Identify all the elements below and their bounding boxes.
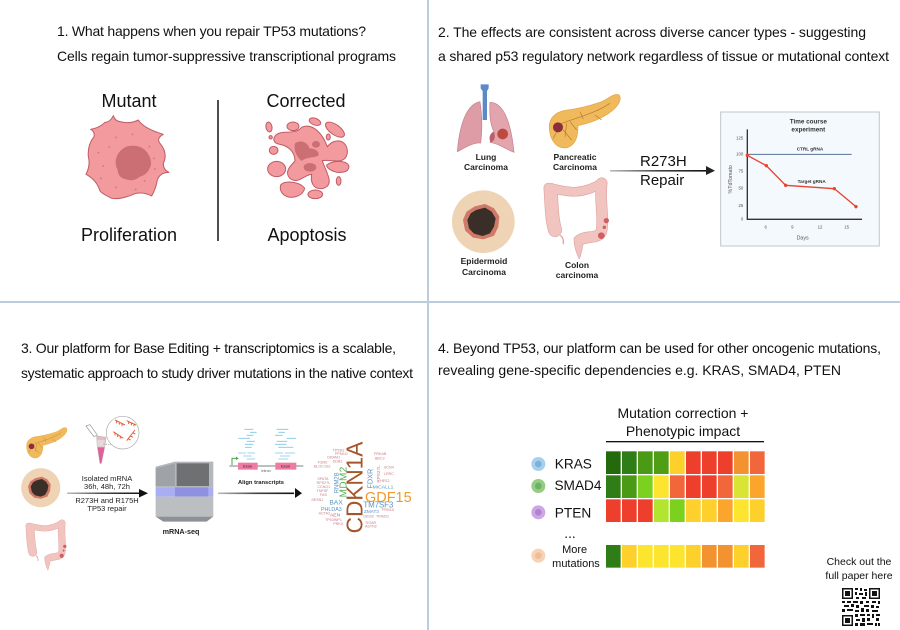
word cloud: genes: PRKX <box>333 522 344 526</box>
label: Apoptosis: Apoptosis <box>267 225 347 245</box>
label: lung carcinoma <box>464 152 508 172</box>
icon: align transcripts: Exon <box>243 464 252 469</box>
label: Corrected: Corrected <box>266 91 346 111</box>
word cloud: genes: SESN1 <box>311 498 323 502</box>
word cloud: genes: CCNG1 <box>317 485 330 489</box>
heatmap: mutation impact <box>531 405 765 570</box>
icon: mutant cell <box>86 116 169 199</box>
label: isolated mRNA: Isolated mRNA <box>82 474 132 483</box>
label: isolated mRNA: 36h, 48h, 72h <box>84 482 130 491</box>
row: KRAS cells <box>606 451 765 474</box>
word cloud: genes: PHLDA3 <box>321 507 342 513</box>
word cloud: genes <box>311 441 412 533</box>
chart: time course: 15 <box>844 224 850 229</box>
chart: time course: %TdTomato <box>728 165 734 194</box>
chart: time course: 125 <box>736 136 744 141</box>
word cloud: genes: AEN <box>330 512 341 518</box>
word cloud: genes: TP53INP1 <box>325 518 342 522</box>
icon: mRNA sequencer <box>156 462 213 522</box>
icon: QR code <box>842 588 880 626</box>
legend: gene labels: More <box>562 544 587 556</box>
callout: full paper: full paper here <box>825 570 893 582</box>
divider: mutant vs corrected <box>217 100 219 241</box>
word cloud: genes: GDF15 <box>365 490 412 506</box>
word cloud: genes: LRRC <box>384 472 394 476</box>
word cloud: genes: TNFSF <box>317 489 329 493</box>
word cloud: genes: TIGAR <box>365 521 377 525</box>
heading: panel 2 <box>438 24 889 64</box>
word cloud: genes: ASTN2 <box>365 525 377 529</box>
callout: full paper: Check out the <box>827 556 892 568</box>
heatmap title <box>617 405 748 439</box>
word cloud: genes: PRKAB <box>374 452 387 456</box>
chart: time course: 6 <box>764 224 767 229</box>
word cloud: genes: MDM2 <box>339 466 350 497</box>
word cloud: genes: HES2 <box>380 479 390 483</box>
heatmap title: Mutation correction + <box>617 405 748 421</box>
chart: time course: 0 <box>741 217 744 222</box>
word cloud: genes: SPATA <box>317 477 329 481</box>
word cloud: genes: TGM2 <box>317 460 327 464</box>
word cloud: genes: PPM1D <box>382 508 395 512</box>
word cloud: genes: CDKN1A <box>342 441 368 533</box>
callout: full paper <box>825 556 893 582</box>
label: epidermoid carcinoma: Epidermoid <box>461 256 507 266</box>
chart: time course <box>721 112 879 246</box>
label: isolated mRNA: TP53 repair <box>87 504 127 513</box>
label: align transcripts: Align transcripts <box>238 480 284 486</box>
legend: gene labels: ... <box>564 526 576 541</box>
word cloud: genes: DESI2 <box>363 514 374 518</box>
icon: epidermoid skin lesion <box>452 190 515 253</box>
heading: panel 1: 1. What happens when you repair TP53 mutations? <box>57 23 366 39</box>
word cloud: genes: RPS27L <box>376 465 381 483</box>
label: pancreatic carcinoma <box>553 152 597 172</box>
label: colon carcinoma <box>556 260 599 280</box>
icon: align transcripts: Intron <box>261 469 271 473</box>
label: Proliferation: Proliferation <box>81 225 177 245</box>
icon: small skin lesion <box>21 468 60 507</box>
icon: pancreas <box>549 94 620 148</box>
icon: tube with mRNA <box>86 416 139 463</box>
label: isolated mRNA: R273H and R175H <box>75 496 139 505</box>
heading: panel 1: Cells regain tumor-suppressive transcriptional programs <box>57 48 396 64</box>
word cloud: genes: TRIM22 <box>376 514 389 518</box>
chart: time course: 100 <box>736 151 744 156</box>
word cloud: genes: FDXR <box>365 469 374 489</box>
chart: time course: 25 <box>738 203 744 208</box>
heading: panel 3: 3. Our platform for Base Editing + transcriptomics is a scalable, <box>21 340 396 356</box>
label: lung carcinoma: Lung <box>476 152 496 162</box>
heading: panel 2: 2. The effects are consistent across diverse cancer types - suggesting <box>438 24 866 40</box>
icon: small pancreas <box>27 428 67 458</box>
chart: time course: Time course <box>790 119 827 126</box>
legend: gene labels <box>531 457 602 570</box>
row: PTEN cells <box>606 499 765 522</box>
word cloud: genes: RNM2B <box>335 472 341 493</box>
icon: colon <box>548 183 609 259</box>
word cloud: genes: ACTA2 <box>319 512 330 516</box>
label: Mutant: Mutant <box>101 91 157 111</box>
word cloud: genes: FAS <box>320 493 327 497</box>
heading: panel 3 <box>21 340 413 381</box>
label: isolated mRNA <box>75 474 139 513</box>
icon: apoptotic cell <box>265 116 349 199</box>
arrow: to sequencer <box>67 489 148 498</box>
heading: panel 4: revealing gene-specific dependencies e.g. KRAS, SMAD4, PTEN <box>438 362 841 378</box>
heading: panel 4 <box>438 340 881 378</box>
word cloud: genes: TP53I3 <box>333 449 344 453</box>
label: lung carcinoma: Carcinoma <box>464 162 508 172</box>
icon: align transcripts <box>229 429 303 473</box>
label: R273H repair: Repair <box>640 172 684 189</box>
label: colon carcinoma: Colon <box>565 260 589 270</box>
row: more mutations cells <box>606 545 765 568</box>
word cloud: genes: BLOC1S2 <box>314 464 330 468</box>
label: R273H repair <box>640 153 687 189</box>
chart: time course: Days <box>797 235 809 241</box>
chart: time course: 9 <box>791 224 794 229</box>
chart: time course: CTRL gRNA <box>797 147 824 152</box>
label: epidermoid carcinoma <box>461 256 507 277</box>
word cloud: genes: BBC3 <box>375 456 385 460</box>
heading: panel 1 <box>57 23 396 64</box>
word cloud: genes: PPM1D <box>335 452 348 456</box>
legend: gene labels: SMAD4 <box>554 478 602 493</box>
icon: lung <box>457 84 514 152</box>
icon: small colon <box>29 523 66 570</box>
arrow: repair <box>610 166 715 175</box>
heading: panel 4: 4. Beyond TP53, our platform can be used for other oncogenic mutations, <box>438 340 881 356</box>
label: colon carcinoma: carcinoma <box>556 270 599 280</box>
chart: time course: Target gRNA <box>798 179 826 184</box>
icon: align transcripts: Exon <box>281 464 290 469</box>
legend: gene labels: KRAS <box>555 457 592 472</box>
chart: time course: experiment <box>791 127 826 134</box>
label: pancreatic carcinoma: Pancreatic <box>554 152 597 162</box>
arrow: to word cloud <box>218 488 302 498</box>
word cloud: genes: MICALL1 <box>373 485 394 491</box>
word cloud: genes: TM7SF3 <box>363 501 394 510</box>
label: pancreatic carcinoma: Carcinoma <box>553 162 597 172</box>
chart: time course: 75 <box>738 169 744 174</box>
panel: other mutations <box>438 340 893 626</box>
panel: cancer types <box>438 24 889 280</box>
label: R273H repair: R273H <box>640 153 687 170</box>
word cloud: genes: DRAM1 <box>327 456 340 460</box>
panel: repair outcome <box>57 23 396 245</box>
row: SMAD4 cells <box>606 475 765 498</box>
word cloud: genes: ZMAT3 <box>364 509 379 514</box>
word cloud: genes: DDB2 <box>333 460 342 464</box>
word cloud: genes: BAX <box>329 500 343 507</box>
word cloud: genes: SCN4 <box>384 465 394 469</box>
heading: panel 3: systematic approach to study driver mutations in the native context <box>21 365 413 381</box>
panel: platform <box>21 340 413 570</box>
chart: time course: 50 <box>738 186 744 191</box>
chart: time course: 12 <box>818 224 823 229</box>
legend: gene labels: mutations <box>552 558 600 570</box>
word cloud: genes: RPS27L <box>317 481 330 485</box>
heading: panel 2: a shared p53 regulatory network regardless of tissue or mutational context <box>438 48 889 64</box>
label: mRNA-seq: mRNA-seq <box>163 527 199 536</box>
label: epidermoid carcinoma: Carcinoma <box>462 267 506 277</box>
legend: gene labels: PTEN <box>555 505 591 520</box>
heatmap title: Phenotypic impact <box>626 423 740 439</box>
